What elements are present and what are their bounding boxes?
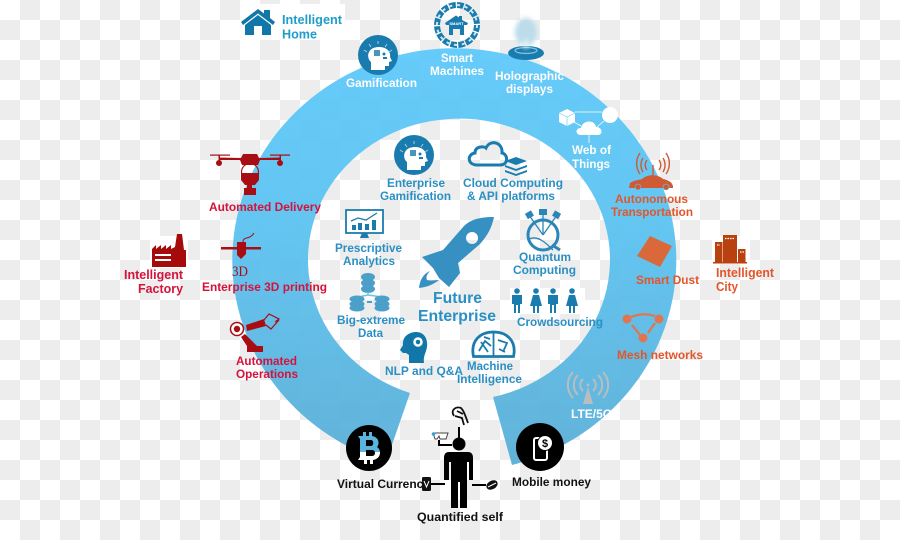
label: Intelligent City: City bbox=[716, 280, 738, 294]
label: Smart Machines: Smart bbox=[441, 51, 473, 65]
label: Machine Intelligence: Machine bbox=[467, 359, 513, 373]
icon: big data databases bbox=[350, 273, 390, 312]
icon: bitcoin bbox=[346, 425, 392, 471]
label: Big-extreme Data: Big-extreme bbox=[337, 313, 405, 327]
icon: quantum computer bbox=[525, 209, 561, 250]
icon: intelligent city bbox=[713, 235, 747, 264]
icon: holographic projector bbox=[508, 18, 544, 60]
icon: robotic arm bbox=[230, 314, 279, 352]
icon: intelligent factory bbox=[152, 234, 186, 267]
icon: rocket bbox=[419, 217, 494, 288]
label: Virtual Currency: Virtual Currency bbox=[337, 477, 430, 491]
icon: smart dust chip bbox=[637, 236, 672, 267]
icon: autonomous car bbox=[629, 153, 673, 190]
label: Web of Things: Things bbox=[572, 157, 610, 171]
label: Machine Intelligence: Intelligence bbox=[457, 372, 522, 386]
ring: technology arc bbox=[232, 48, 676, 465]
icon: mobile money bbox=[516, 423, 564, 471]
label: Enterprise Gamification: Gamification bbox=[380, 189, 451, 203]
label: Autonomous Transportation: Transportation bbox=[611, 205, 693, 219]
label: Quantified self: Quantified self bbox=[417, 510, 504, 524]
label: Holographic displays: displays bbox=[506, 82, 553, 96]
label: Enterprise Gamification: Enterprise bbox=[387, 176, 445, 190]
icon: NLP head with gear bbox=[400, 332, 427, 363]
icon: intelligent home bbox=[241, 9, 275, 35]
icon: mesh network bbox=[623, 314, 663, 342]
label: Prescriptive Analytics: Prescriptive bbox=[335, 241, 402, 255]
label: Web of Things: Web of bbox=[572, 143, 612, 157]
icon: 3D printer: 3D bbox=[232, 264, 248, 280]
icon: web of things bbox=[559, 107, 618, 143]
label: Mobile money: Mobile money bbox=[512, 475, 591, 489]
label: Automated Delivery: Automated Delivery bbox=[209, 200, 321, 214]
label: Holographic displays: Holographic bbox=[495, 69, 564, 83]
icon: machine intelligence brain bbox=[473, 332, 514, 356]
icon: quantified self figure bbox=[422, 407, 499, 508]
icon: analytics monitor bbox=[346, 210, 383, 238]
icon: smart machines bbox=[437, 5, 477, 45]
label: Autonomous Transportation: Autonomous bbox=[615, 192, 688, 206]
label: Mesh networks: Mesh networks bbox=[617, 348, 703, 362]
icon: gamification head bbox=[358, 35, 398, 75]
label: Future Enterprise: Future bbox=[433, 290, 482, 307]
label: Intelligent City: Intelligent bbox=[716, 266, 775, 280]
label: Smart Machines: Machines bbox=[430, 64, 484, 78]
label: LTE/5G: LTE/5G bbox=[571, 407, 612, 421]
label: Crowdsourcing: Crowdsourcing bbox=[517, 315, 603, 329]
icon: 3D printer bbox=[221, 233, 261, 280]
icon: LTE tower bbox=[568, 372, 608, 404]
icon: delivery drone bbox=[210, 154, 290, 195]
label: Smart Dust: Smart Dust bbox=[636, 273, 699, 287]
label: Gamification: Gamification bbox=[346, 76, 417, 90]
label: Automated Operations: Automated bbox=[236, 354, 297, 368]
icon: mobile money: $ bbox=[542, 438, 548, 450]
label: Quantum Computing: Quantum bbox=[519, 250, 571, 264]
label: Prescriptive Analytics: Analytics bbox=[343, 254, 395, 268]
label: Intelligent Home: Home bbox=[282, 28, 317, 42]
icon: crowd of people bbox=[512, 288, 578, 313]
label: Intelligent Factory: Intelligent bbox=[124, 268, 184, 282]
icon: smart machines: SMART bbox=[449, 21, 464, 26]
label: Future Enterprise: Enterprise bbox=[418, 308, 496, 325]
label: Enterprise 3D printing: Enterprise 3D printing bbox=[202, 280, 327, 294]
label: Quantum Computing: Computing bbox=[513, 263, 576, 277]
label: NLP and Q&A: NLP and Q&A bbox=[385, 364, 463, 378]
label: Intelligent Factory: Factory bbox=[138, 282, 183, 296]
label: Big-extreme Data: Data bbox=[358, 326, 383, 340]
label: Intelligent Home: Intelligent bbox=[282, 13, 343, 27]
icon: cloud and stack bbox=[469, 143, 527, 176]
label: Cloud Computing and API platforms: & API platforms bbox=[467, 189, 555, 203]
label: Cloud Computing and API platforms: Cloud Computing bbox=[463, 176, 563, 190]
label: Automated Operations: Operations bbox=[236, 367, 298, 381]
icon: enterprise gamification head bbox=[394, 135, 434, 175]
